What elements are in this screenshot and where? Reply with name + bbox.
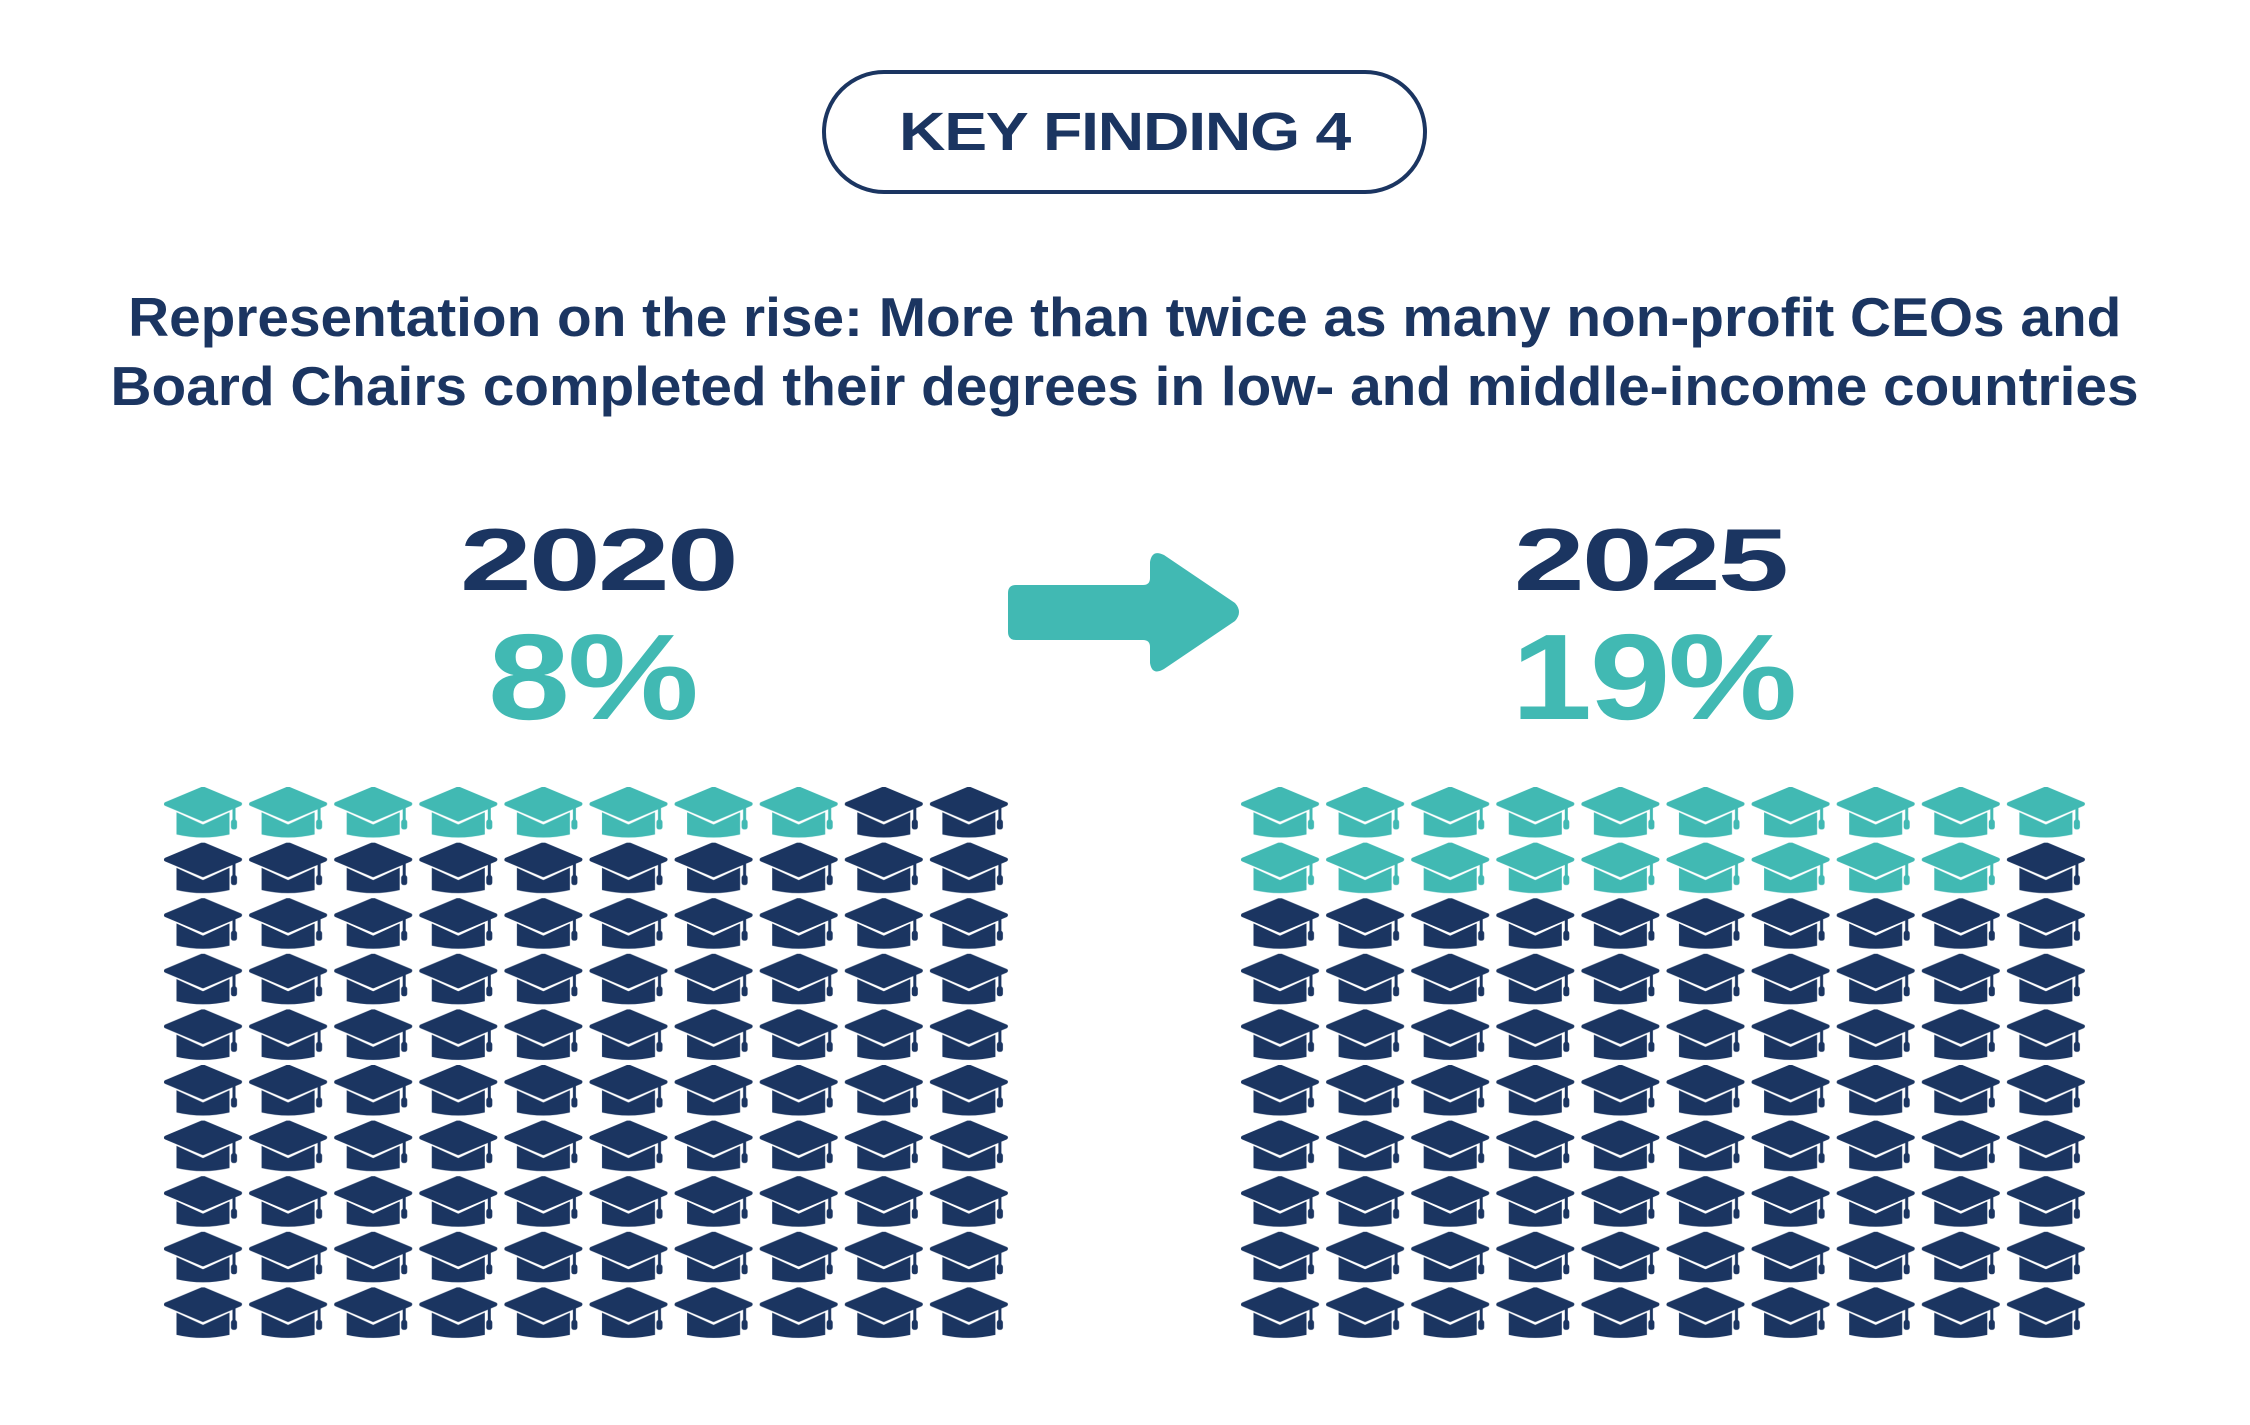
grid 2020 (8 of 100 teal) <box>163 787 1014 1343</box>
year 2025: 2025 <box>1514 510 1786 609</box>
percent 2025: 19% <box>1511 609 1795 745</box>
percent 2020: 8% <box>488 609 696 745</box>
key finding pill: KEY FINDING 4 <box>899 102 1350 162</box>
subtitle <box>111 286 2139 417</box>
year 2020: 2020 <box>460 510 736 609</box>
subtitle: Board Chairs completed their degrees in low- and middle-income countries <box>111 355 2139 417</box>
key finding pill <box>822 70 1427 194</box>
subtitle: Representation on the rise: More than twice as many non-profit CEOs and <box>128 286 2122 348</box>
grid 2025 (19 of 100 teal) <box>1240 787 2091 1343</box>
